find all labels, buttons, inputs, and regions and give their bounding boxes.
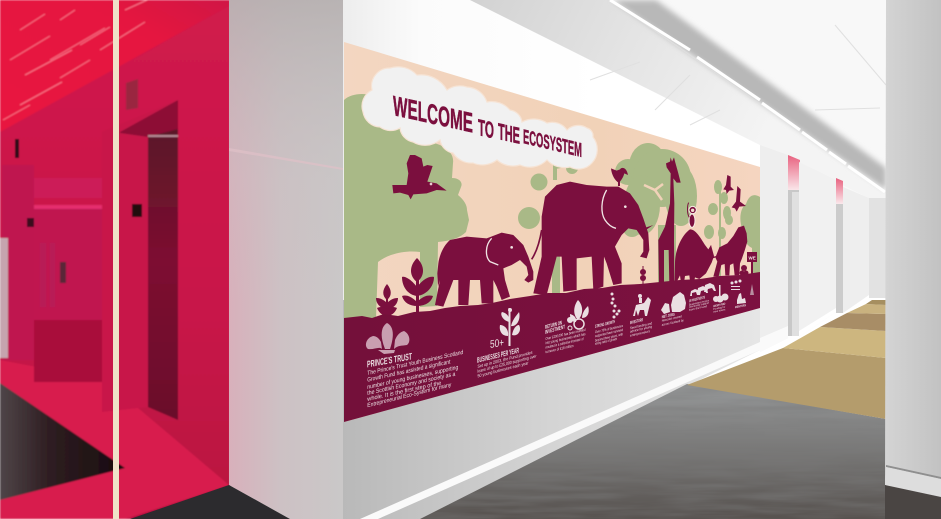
text block: Set up in 2003, the Fund provides — [478, 350, 533, 369]
panel section: businesses per year: BUSINESSES PER YEAR — [477, 346, 519, 365]
text block: into young businesses which has — [546, 332, 586, 345]
icon: giraffe group — [713, 285, 728, 302]
photo background: far corridor pillars, doors and walls — [760, 145, 886, 352]
text block — [546, 328, 586, 354]
small elephant — [435, 233, 533, 307]
text block: Businesses receive — [689, 298, 709, 307]
text block: from the Fund — [689, 304, 707, 312]
tree: circle-leaf sapling behind elephants — [518, 160, 578, 297]
icon: sign post and small plant: WE — [748, 256, 756, 260]
icon: two birds, right — [723, 175, 746, 212]
text block — [713, 305, 726, 314]
text block: beyond three years, with — [595, 332, 623, 343]
panel: ecosystem wall mural — [344, 42, 760, 422]
heading: NET JOBS — [662, 311, 675, 319]
text block — [366, 350, 463, 409]
icon: small bird on elephant — [611, 168, 628, 186]
statistic: 50+ — [490, 337, 504, 351]
icon: sign post and small plant — [640, 252, 757, 286]
text block: Over 75% of businesses — [595, 324, 623, 334]
text block: mentoring support — [689, 301, 709, 309]
icon: money tree — [567, 300, 589, 330]
text block: resulted in a collective increase of — [546, 337, 584, 350]
icon: three feathers — [366, 323, 409, 354]
icon: flying bird, left — [392, 155, 447, 199]
tree: far right sapling — [704, 180, 733, 280]
title: WELCOME — [393, 90, 473, 140]
text block: supported have survived — [595, 328, 623, 338]
icon: small leaf plant — [376, 284, 398, 316]
heading — [545, 320, 565, 336]
panel: ecosystem wall mural: ECOSYSTEM — [523, 126, 582, 162]
icon: sprig — [610, 292, 620, 318]
text block — [630, 321, 652, 338]
text block: Growth Fund has assisted a significant — [367, 359, 451, 384]
icon: birds and lion — [730, 280, 746, 304]
text block: strong rates of growth — [595, 337, 617, 346]
heading: RETURN ON — [545, 320, 562, 331]
lion — [709, 226, 747, 277]
heading: MENTORS — [735, 303, 746, 309]
icon: pale tree — [750, 284, 754, 295]
heading: INVESTORS — [630, 317, 643, 325]
icon: lion with monkey — [633, 294, 651, 316]
text block: Seed funding and — [630, 321, 652, 330]
panel section: investors — [630, 294, 652, 338]
text block: advice for young — [630, 325, 652, 334]
tree: far right tree — [740, 195, 760, 276]
photo background: red elevator lobby — [0, 0, 230, 519]
text block: number of young businesses, supporting — [367, 365, 458, 391]
panel section: strong growth — [595, 292, 623, 346]
panel section: return on investment — [545, 300, 589, 354]
text block — [662, 314, 684, 327]
panel section: strong growth: STRONG GROWTH — [595, 319, 615, 329]
text block: new starts — [713, 307, 726, 314]
heading: INVESTMENT — [545, 324, 565, 336]
heading: GROWTH FUND — [713, 302, 726, 308]
cloud — [362, 67, 597, 169]
photo background: carpet stripes — [687, 300, 886, 419]
tree: right tree behind giraffe — [615, 143, 697, 285]
photo background: wood floor — [420, 384, 886, 519]
heading: PRINCE'S TRUST — [367, 351, 412, 370]
text block: The Prince's Trust Youth Business Scotland — [367, 350, 463, 377]
big elephant — [532, 168, 653, 295]
tree: large left tree — [344, 94, 469, 322]
panel section: giraffes — [713, 285, 728, 314]
panel section: far right items — [730, 280, 754, 309]
text block: 50 young businesses each year — [478, 360, 529, 378]
title — [393, 90, 582, 162]
text block: whole. It is the first step of the — [366, 381, 442, 403]
text block — [595, 324, 623, 346]
icon: elephant herd — [690, 283, 716, 296]
icon: growing plant — [500, 308, 520, 346]
icon: rhino — [661, 292, 686, 314]
giraffe — [658, 157, 681, 283]
rhino with monkey — [675, 203, 714, 281]
panel section: elephants — [689, 283, 716, 312]
text block: Funding for — [713, 305, 725, 311]
text block: turnover of £18 million — [546, 344, 574, 354]
photo background: baseboard — [360, 342, 760, 519]
text block: across Scotland by — [662, 318, 684, 327]
panel section: net jobs — [661, 292, 686, 327]
photo background: grey column beside the lobby — [130, 0, 343, 519]
text block: loans of up to £25,000 supporting over — [478, 353, 537, 374]
mural background — [344, 42, 760, 422]
text block: Over £200,000 has been invested — [546, 328, 586, 341]
photo background: ceiling with duct and light strips — [470, 0, 941, 210]
text block: New jobs created — [662, 314, 682, 323]
panel section: businesses per year — [477, 308, 537, 378]
panel section: Prince's Trust — [366, 323, 463, 409]
panel: maroon ground band — [344, 272, 760, 422]
text block: Entrepreneurial Eco-System for many — [367, 381, 452, 409]
heading: 10 INVESTMENTS — [689, 295, 705, 303]
photo background: white corridor wall — [343, 0, 760, 519]
text block: the Scottish Economy and society as a — [367, 372, 456, 397]
photo background: right foreground column — [885, 0, 941, 519]
title: THE — [498, 118, 520, 149]
text block — [689, 298, 709, 312]
text block: entrepreneurs — [630, 329, 650, 338]
photo background: vertical light strip — [113, 0, 119, 519]
icon: large leaf plant — [402, 258, 434, 312]
title: TO — [478, 114, 494, 143]
